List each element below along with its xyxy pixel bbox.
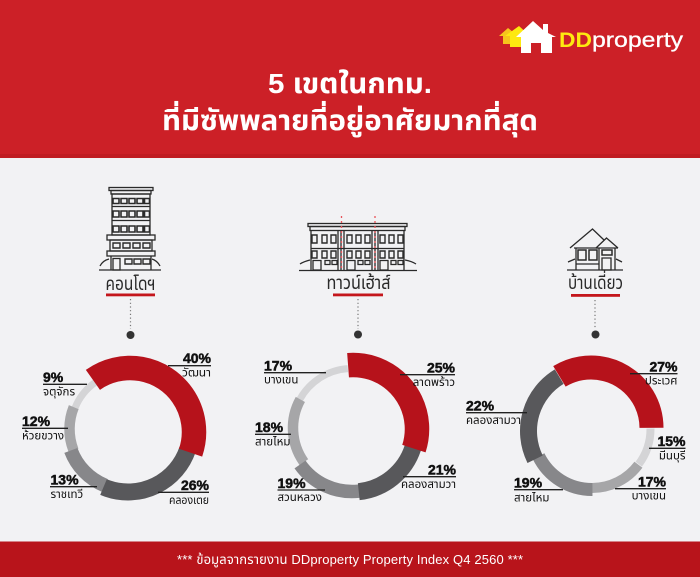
label: 19% Suan Luang [278, 475, 325, 504]
label: 19% Sai Mai: สายไหม [514, 492, 549, 504]
label: 19% Sai Mai [514, 474, 563, 504]
labels: townhouse [255, 358, 457, 504]
label: 22% Khlong Sam Wa: คลองสามวา [466, 415, 521, 427]
label: 26% Khlong Toei: คลองเตย [169, 495, 209, 507]
label: 15% Min Buri: 15% [657, 433, 686, 449]
label: 27% Prawet: ประเวศ [645, 376, 678, 388]
connector: condo dotted line and dot [126, 299, 134, 339]
label: 12% Huai Khwang [22, 413, 68, 442]
connector: townhouse dotted line and dot [354, 299, 362, 338]
label: townhouse: ทาวน์เฮ้าส์ [326, 271, 391, 294]
label: 40% Watthana [168, 350, 212, 380]
label: 40% Watthana: 40% [183, 350, 212, 366]
label: 13% Ratchathewi [50, 472, 97, 501]
label: 15% Min Buri [649, 433, 686, 462]
label: 25% Lat Phrao: ลาดพร้าว [413, 375, 455, 389]
labels: condo [22, 350, 212, 507]
label: 25% Lat Phrao [400, 360, 456, 389]
title [162, 68, 538, 138]
footer band [0, 542, 700, 577]
header band [0, 0, 700, 158]
label: detached house [568, 269, 623, 297]
label: 17% Bang Khen [615, 474, 667, 502]
label: 18% Sai Mai: 18% [255, 419, 284, 435]
label: 12% Huai Khwang: 12% [22, 413, 51, 429]
icon: detached house [567, 229, 623, 270]
label: 9% Chatuchak: จตุจักร [43, 386, 75, 398]
label: 9% Chatuchak: 9% [43, 369, 64, 385]
label: 27% Prawet: 27% [649, 358, 678, 374]
label: 25% Lat Phrao: 25% [427, 360, 456, 376]
label: 21% Khlong Sam Wa: 21% [428, 462, 457, 478]
icon: condo building [99, 188, 161, 270]
label: 13% Ratchathewi: ราชเทวี [50, 488, 83, 501]
label: 40% Watthana: วัฒนา [182, 366, 211, 380]
title: ที่มีซัพพลายที่อยู่อาศัยมากที่สุด [162, 100, 538, 138]
label: 18% Sai Mai [255, 419, 291, 448]
label: 13% Ratchathewi: 13% [50, 472, 79, 488]
label: 15% Min Buri: มีนบุรี [659, 450, 686, 462]
label: 22% Khlong Sam Wa: 22% [466, 398, 495, 414]
label: 27% Prawet [630, 358, 678, 388]
label: 12% Huai Khwang: ห้วยขวาง [22, 428, 64, 442]
label: 26% Khlong Toei [158, 477, 210, 507]
label: 17% Bang Khen: บางเขน [632, 490, 666, 502]
donut chart: detached house [507, 345, 677, 516]
labels: detached house [466, 358, 686, 504]
label: 21% Khlong Sam Wa: คลองสามวา [401, 479, 456, 491]
label: 17% Bang Khen [264, 358, 326, 386]
label: 17% Bang Khen: 17% [264, 358, 293, 374]
label: 18% Sai Mai: สายไหม [255, 436, 290, 448]
label: 19% Sai Mai: 19% [514, 474, 543, 490]
footer source note: *** ข้อมูลจากรายงาน DDproperty Property Index Q4 2560 *** [177, 552, 523, 567]
label: 21% Khlong Sam Wa [401, 462, 457, 491]
title: 5 เขตในกทม. [268, 68, 432, 99]
logo: DDproperty: property [592, 28, 683, 52]
label: 17% Bang Khen: 17% [638, 474, 667, 490]
label: 26% Khlong Toei: 26% [181, 477, 210, 493]
label: 19% Suan Luang: สวนหลวง [278, 492, 322, 504]
label: 19% Suan Luang: 19% [278, 475, 306, 491]
connector: detached house dotted line and dot [592, 300, 600, 338]
logo: DDproperty: DD [559, 28, 592, 52]
label: 17% Bang Khen: บางเขน [264, 374, 298, 386]
label: detached house: บ้านเดี่ยว [568, 269, 623, 294]
label: condo: คอนโดฯ [106, 274, 156, 295]
label: 9% Chatuchak [43, 369, 87, 398]
icon: townhouses [299, 216, 417, 270]
logo: DDproperty [499, 21, 683, 53]
donut chart: condo [41, 343, 219, 521]
label: 22% Khlong Sam Wa [466, 398, 527, 427]
donut chart: townhouse [270, 346, 434, 510]
